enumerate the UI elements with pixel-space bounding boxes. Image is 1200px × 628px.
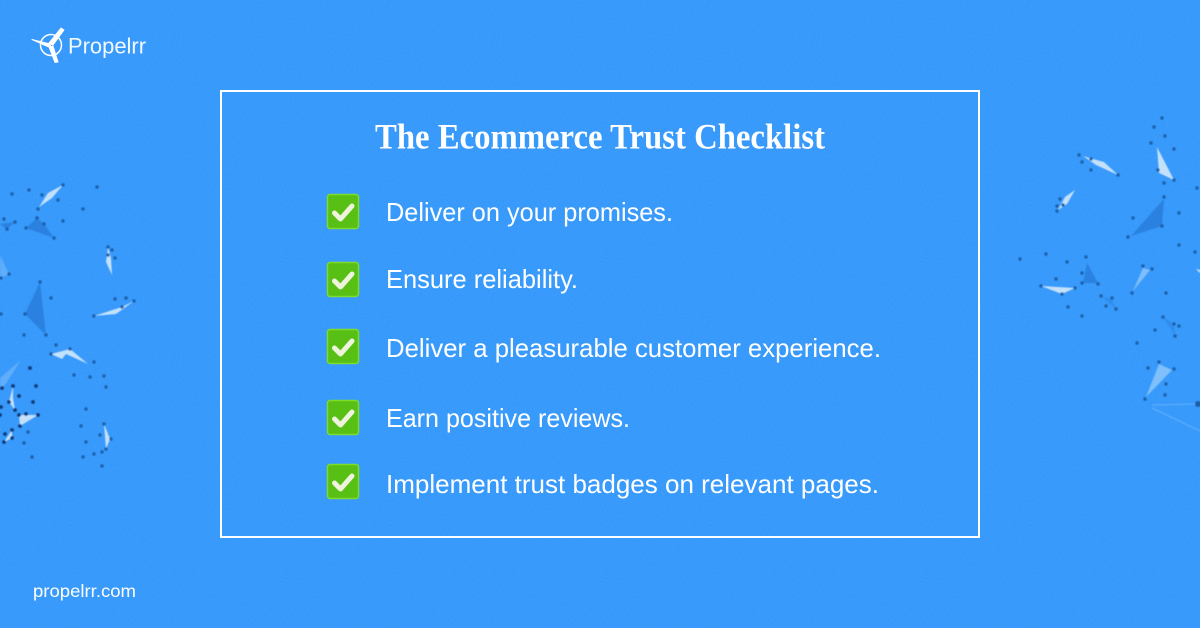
icon: green check	[328, 194, 358, 228]
icon: green check	[328, 262, 358, 296]
checklist item 1: Deliver on your promises.	[386, 197, 673, 227]
website url: propelrr.com	[33, 581, 136, 601]
checklist item 4	[328, 400, 630, 434]
checklist item 2	[328, 262, 578, 296]
decoration: left particle cluster	[0, 183, 136, 468]
logo wordmark: Propelrr	[68, 34, 146, 58]
checklist item 4: Earn positive reviews.	[386, 403, 630, 433]
checklist item 2: Ensure reliability.	[386, 264, 578, 294]
logo: Propelrr	[32, 28, 146, 62]
decoration: right particle cluster	[1018, 116, 1200, 431]
icon: green check	[328, 400, 358, 434]
checklist item 3: Deliver a pleasurable customer experience.	[386, 333, 881, 363]
icon: propeller	[32, 28, 64, 62]
checklist item 5: Implement trust badges on relevant pages.	[386, 469, 879, 499]
panel: checklist frame	[221, 91, 979, 537]
icon: green check	[328, 464, 358, 498]
heading: The Ecommerce Trust Checklist	[375, 116, 825, 156]
icon: green check	[328, 330, 358, 364]
